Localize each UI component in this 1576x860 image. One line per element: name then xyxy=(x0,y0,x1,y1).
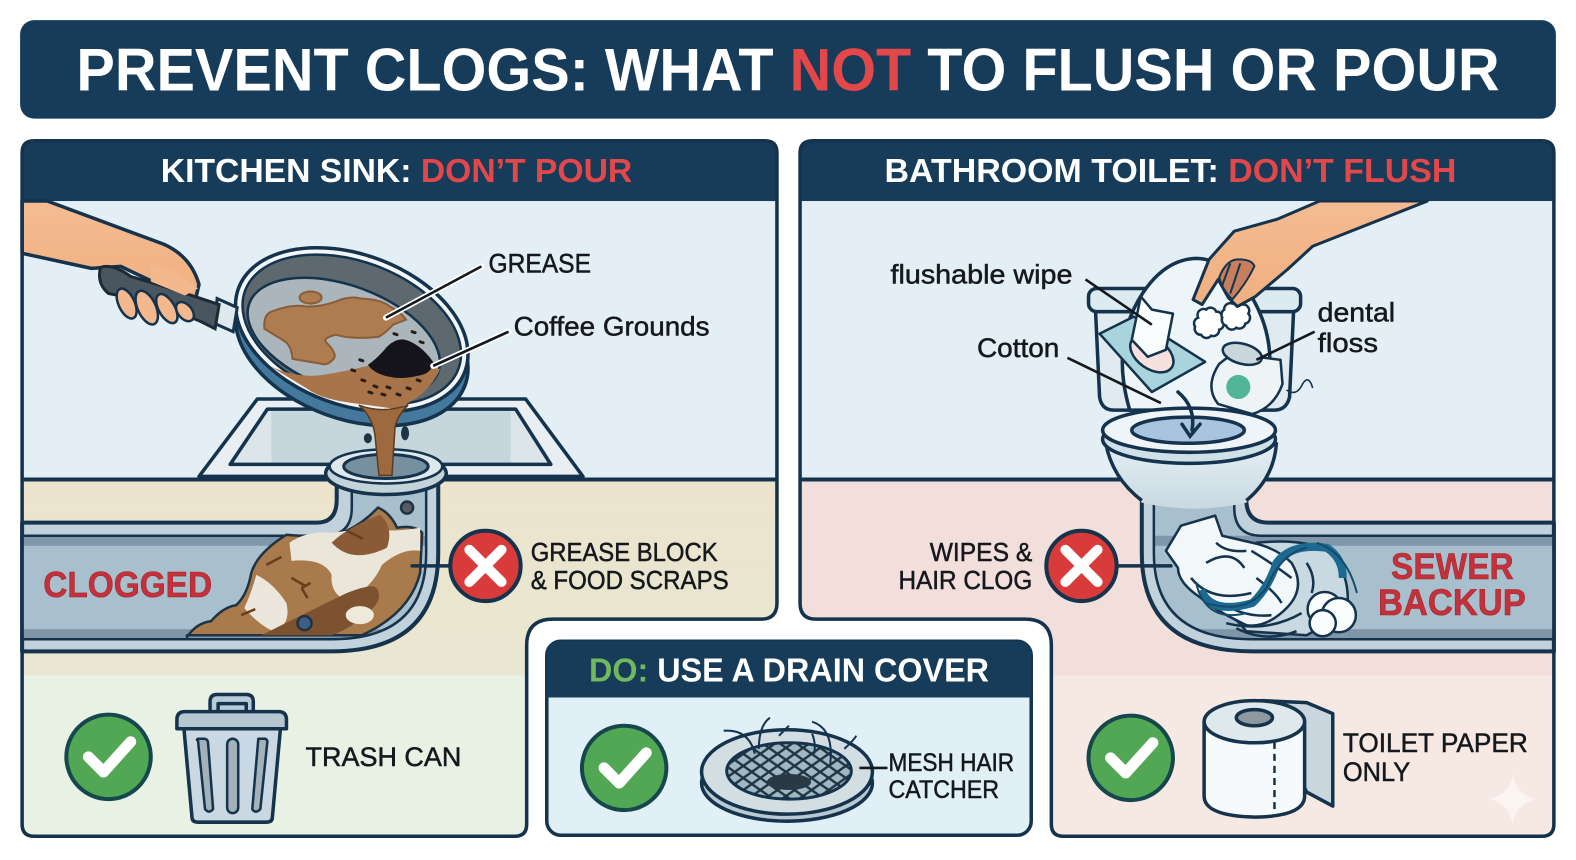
icon: trash can xyxy=(177,695,286,822)
mesh hair catcher label: CATCHER xyxy=(889,776,999,804)
panel: bathroom toilet xyxy=(794,139,1568,841)
bathroom heading: BATHROOM TOILET: DON’T FLUSH xyxy=(884,153,1456,190)
cotton balls in hand xyxy=(1194,301,1250,338)
leader: mesh xyxy=(859,767,888,769)
sewer backup label xyxy=(1378,545,1526,623)
leader: flushable wipe xyxy=(1086,279,1152,325)
mesh hair catcher label xyxy=(889,749,1014,804)
toilet lid xyxy=(1122,258,1270,410)
icon: green check xyxy=(66,715,151,799)
grease block label: GREASE BLOCK xyxy=(531,537,718,567)
mesh hair catcher label: MESH HAIR xyxy=(889,749,1014,777)
dental floss xyxy=(1211,339,1313,414)
panel: kitchen sink xyxy=(20,139,784,841)
toilet tank xyxy=(1089,288,1301,410)
floor drain flange xyxy=(326,449,446,495)
toilet paper label: ONLY xyxy=(1343,756,1410,787)
icon: red x xyxy=(450,531,521,601)
leader: cotton xyxy=(1067,358,1161,403)
icon: toilet paper roll xyxy=(1204,701,1333,817)
leader from clog to x xyxy=(412,564,452,568)
grease blob xyxy=(264,298,406,364)
hand dropping cotton xyxy=(1193,201,1427,307)
wipes and hair clog label: HAIR CLOG xyxy=(899,565,1032,595)
title banner xyxy=(20,20,1556,119)
dental floss label: dental xyxy=(1318,297,1395,328)
lower grease pool xyxy=(271,365,440,409)
leader: dental floss xyxy=(1256,332,1315,360)
coffee grounds label: Coffee Grounds xyxy=(514,311,710,342)
watermark sparkle xyxy=(1490,774,1536,824)
frying pan with grease and coffee xyxy=(213,218,491,456)
cotton label: Cotton xyxy=(977,332,1059,363)
grease block label: & FOOD SCRAPS xyxy=(531,565,729,595)
icon: green check xyxy=(582,726,666,810)
clogged label: CLOGGED xyxy=(43,564,212,605)
trash can label: TRASH CAN xyxy=(306,741,461,772)
sewer backup label: SEWER xyxy=(1391,545,1514,587)
arrow into bowl xyxy=(1178,392,1200,436)
clog of wipes and hair xyxy=(1166,516,1357,637)
drain cover heading: DO: USE A DRAIN COVER xyxy=(589,652,989,689)
sewer pipe xyxy=(1140,501,1556,654)
flushable wipe label: flushable wipe xyxy=(891,258,1072,289)
coffee grounds pile xyxy=(368,339,433,378)
toilet paper label xyxy=(1343,727,1528,787)
icon: red x xyxy=(1046,531,1117,601)
wipes and hair clog label xyxy=(899,537,1033,595)
dental floss label xyxy=(1318,297,1395,358)
clog of grease and food scraps xyxy=(187,502,422,637)
leader: grease xyxy=(386,266,481,318)
panel: drain cover xyxy=(547,641,1031,835)
wipes and hair clog label: WIPES & xyxy=(930,537,1033,567)
grease label: GREASE xyxy=(488,247,591,278)
leader: coffee xyxy=(433,332,509,366)
panel outlines xyxy=(22,141,1554,836)
kitchen heading: KITCHEN SINK: DON’T POUR xyxy=(161,153,632,190)
grease stream pouring xyxy=(359,405,409,475)
sink basin xyxy=(199,399,583,476)
dental floss label: floss xyxy=(1318,327,1378,358)
icon: green check xyxy=(1089,716,1173,800)
toilet bowl xyxy=(1103,408,1276,509)
hand holding pan handle xyxy=(22,201,237,332)
sewer backup label: BACKUP xyxy=(1378,581,1526,623)
toilet paper label: TOILET PAPER xyxy=(1343,727,1528,758)
title text: PREVENT CLOGS: WHAT NOT TO FLUSH OR POUR xyxy=(76,35,1500,103)
icon: mesh hair catcher xyxy=(702,718,872,821)
clogged pipe xyxy=(20,480,442,651)
leader from x to clog xyxy=(1116,564,1171,568)
grease block label xyxy=(531,537,729,595)
wipes packet xyxy=(1100,297,1205,392)
